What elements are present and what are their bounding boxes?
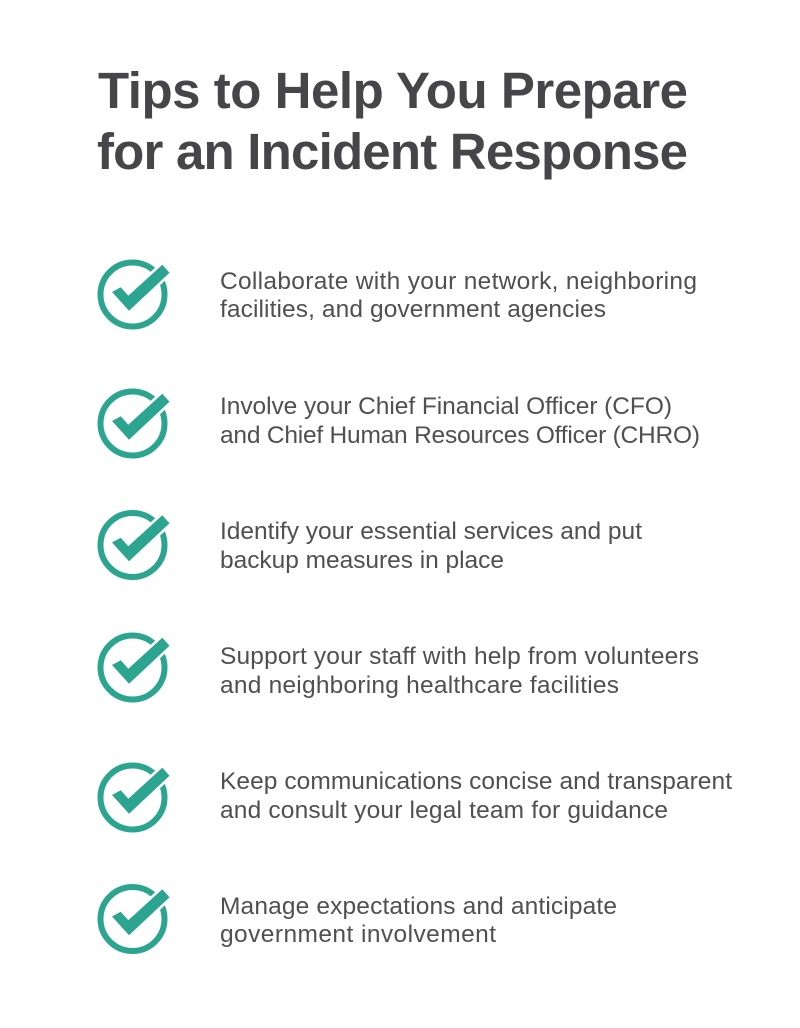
tip 3 [100, 513, 642, 577]
tip 1 text: Collaborate with your network, neighboring [220, 268, 697, 295]
title: Tips to Help You Prepare [98, 62, 688, 119]
tip 4 text: and neighboring healthcare facilities [220, 672, 619, 699]
icon: check mark 1 [100, 262, 170, 326]
tip 6 [100, 887, 617, 951]
tip 4 text: Support your staff with help from volunteers [220, 643, 699, 670]
tip 1 [100, 262, 697, 326]
tip 4 [100, 636, 699, 700]
icon: check mark 2 [100, 392, 170, 456]
icon: check mark 6 [100, 887, 170, 951]
icon: check mark 5 [100, 766, 170, 830]
icon: check mark 4 [100, 636, 170, 700]
tip 6 text: government involvement [220, 921, 496, 948]
tip 5 text: and consult your legal team for guidance [220, 797, 668, 824]
tip 2 text: and Chief Human Resources Officer (CHRO) [220, 422, 700, 449]
tip 1 text: facilities, and government agencies [220, 296, 606, 323]
tip 2 text: Involve your Chief Financial Officer (CFO) [220, 393, 672, 420]
tip 1 text [220, 268, 697, 323]
tip 3 text: backup measures in place [220, 547, 504, 574]
tip 5 text [220, 768, 732, 824]
tip 6 text: Manage expectations and anticipate [220, 893, 617, 920]
title: for an Incident Response [97, 123, 688, 180]
tip 3 text: Identify your essential services and put [220, 518, 642, 545]
tip 2 [100, 392, 700, 456]
tip 6 text [220, 893, 617, 948]
tip 3 text [220, 518, 642, 574]
title [97, 62, 688, 180]
tip 4 text [220, 643, 699, 699]
icon: check mark 3 [100, 513, 170, 577]
tip 5 text: Keep communications concise and transparent [220, 768, 732, 795]
tip 5 [100, 766, 732, 830]
tip 2 text [220, 393, 700, 449]
